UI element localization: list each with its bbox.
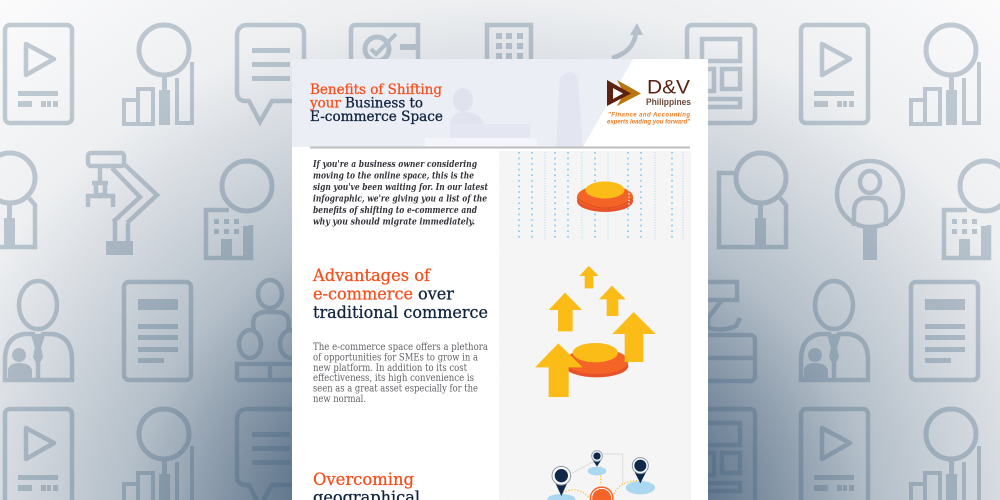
icon: data rain with coin <box>519 152 683 240</box>
body paragraph: new normal. <box>313 394 366 405</box>
body paragraph: effectiveness, its high convenience is <box>313 373 474 384</box>
title: Benefits of Shifting <box>310 82 442 98</box>
illustration column <box>499 151 691 500</box>
icon: growth arrows with coin <box>535 266 656 397</box>
logo <box>607 76 691 126</box>
heading: advantages: over <box>418 284 455 304</box>
logo: experts leading you forward" <box>607 120 690 126</box>
coin base <box>565 343 628 377</box>
banner photo silhouettes <box>425 72 583 147</box>
connection dots <box>563 467 638 498</box>
body paragraph: The e-commerce space offers a plethora <box>313 342 488 353</box>
title: your Business to <box>309 96 423 112</box>
heading: overcoming <box>313 470 420 500</box>
pins <box>552 451 648 496</box>
intro paragraph: infographic, we're giving you a list of the <box>313 194 487 204</box>
body paragraph: of opportunities for SMEs to grow in a <box>313 352 478 364</box>
body paragraph: seen as a great asset especially for the <box>313 384 478 394</box>
page sheet <box>292 59 708 500</box>
logo: Philippines <box>646 97 691 107</box>
heading: advantages: traditional commerce <box>313 303 488 323</box>
title: E-commerce Space <box>310 109 443 125</box>
header banner <box>292 59 691 147</box>
title <box>309 82 443 125</box>
heading: overcoming: Overcoming <box>313 470 414 490</box>
pin discs <box>547 467 655 500</box>
heading: advantages: Advantages of <box>312 266 432 286</box>
intro paragraph: sign you've been waiting for. In our latest <box>313 182 488 193</box>
heading: advantages: e-commerce <box>313 284 413 304</box>
logo: D&V <box>647 76 690 98</box>
intro paragraph: why you should migrate immediately. <box>313 216 475 228</box>
body paragraph <box>313 342 488 405</box>
coin <box>577 182 633 212</box>
logo: "Finance and Accounting <box>608 112 690 118</box>
heading: advantages <box>312 266 488 323</box>
intro paragraph: benefits of shifting to e-commerce and <box>313 205 477 216</box>
intro paragraph <box>312 159 488 228</box>
logo mark <box>607 80 641 106</box>
intro paragraph: moving to the online space, this is the <box>313 170 474 182</box>
icon: location network <box>547 451 655 500</box>
dotted data lines <box>519 152 683 240</box>
intro paragraph: If you're a business owner considering <box>312 159 477 170</box>
central orange pin <box>590 486 614 500</box>
body paragraph: new platform. In addition to its cost <box>313 363 467 374</box>
